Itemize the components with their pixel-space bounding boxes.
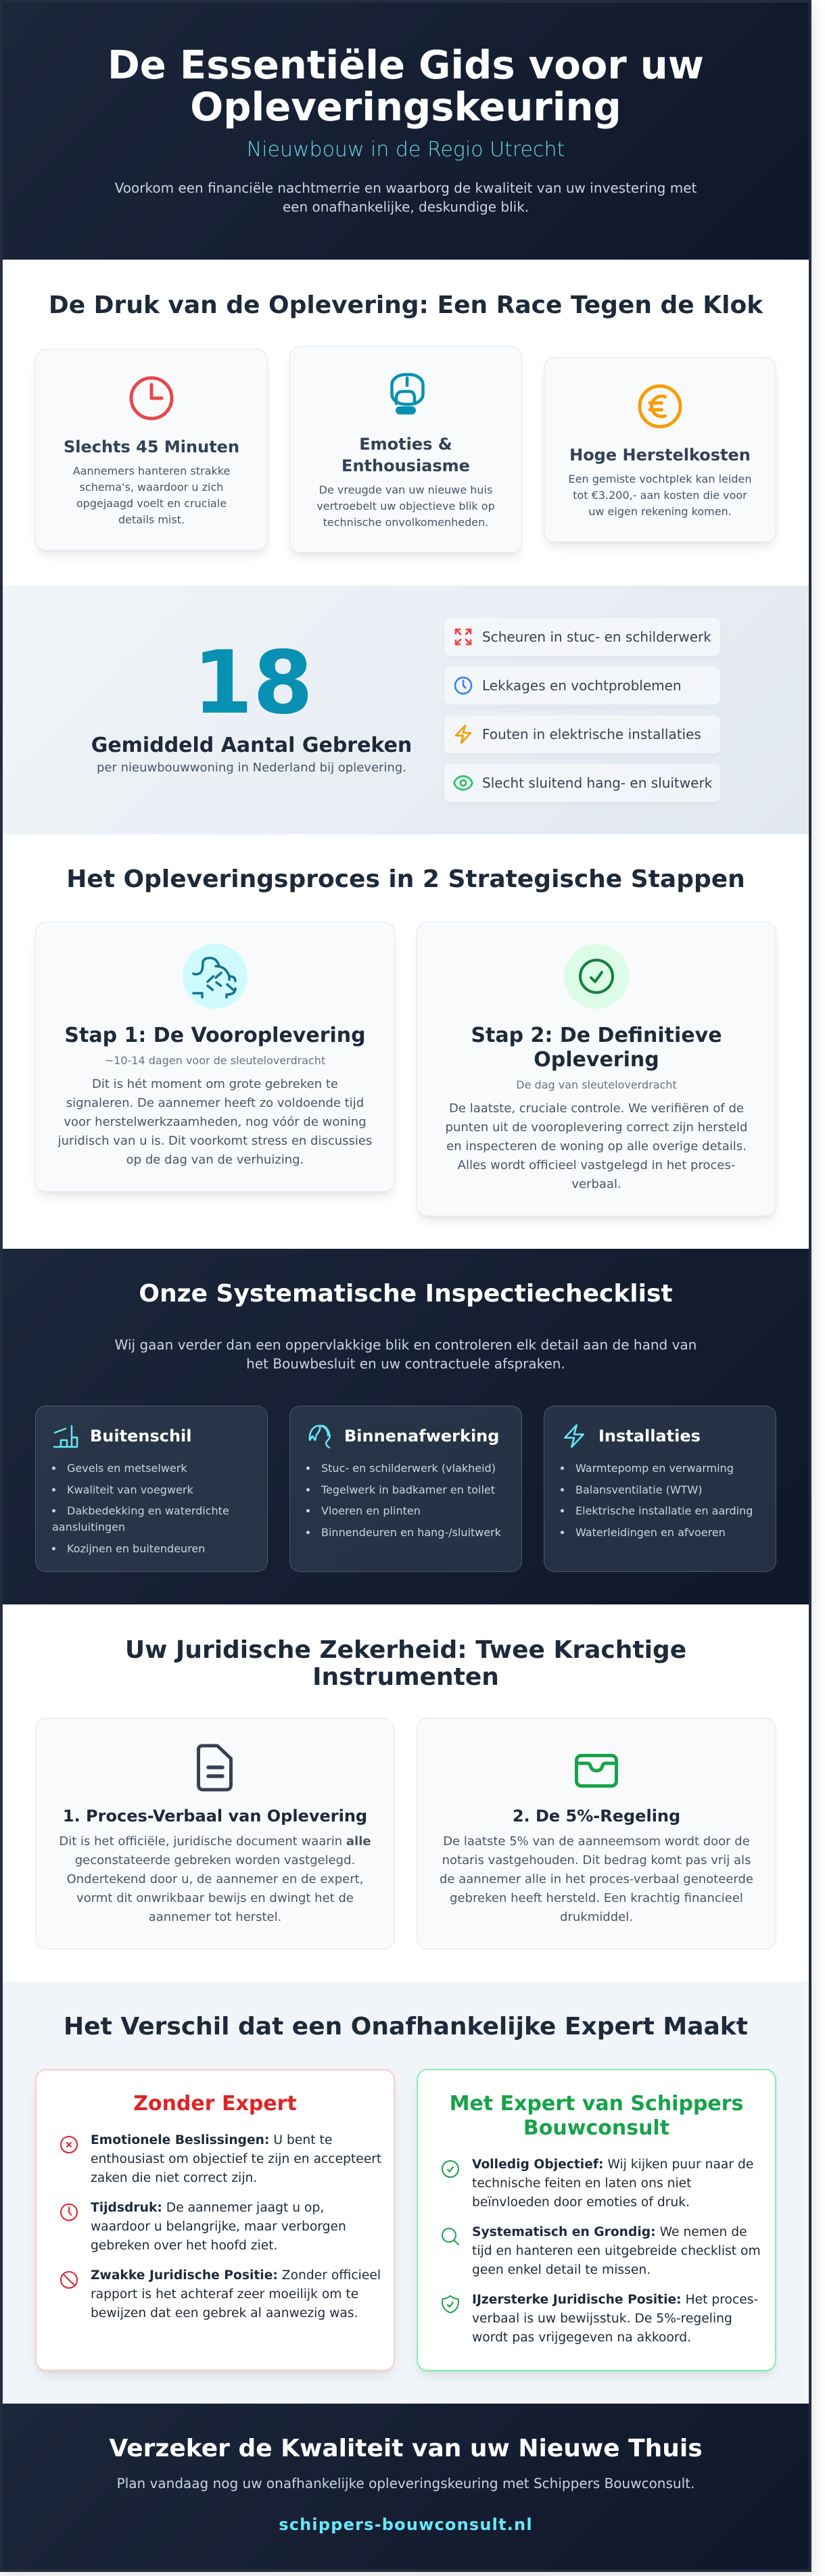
point: time pressure: waardoor u belangrijke, maar verborgen bbox=[91, 2220, 346, 2234]
point: systematic: tijd en hanteren een uitgebreide checklist om bbox=[472, 2244, 761, 2258]
card title: Binnenafwerking bbox=[344, 1427, 499, 1446]
card: without expert bbox=[35, 2069, 395, 2371]
checklist bbox=[561, 1462, 753, 1539]
point: objective bbox=[442, 2157, 753, 2210]
step timing: ~10-14 dagen voor de sleuteloverdracht bbox=[105, 1054, 325, 1067]
card title bbox=[341, 435, 470, 475]
point: objective: technische feiten en laten ons niet bbox=[472, 2176, 691, 2191]
card title: Installaties bbox=[598, 1427, 701, 1446]
card text: details mist. bbox=[118, 513, 185, 526]
icon: deposit box bbox=[575, 1754, 618, 1788]
point: strong legal position bbox=[440, 2291, 753, 2347]
step text bbox=[446, 1101, 747, 1191]
point: time pressure bbox=[60, 2201, 346, 2253]
heading bbox=[125, 1636, 686, 1691]
checklist: Kozijnen en buitendeuren bbox=[67, 1542, 205, 1555]
heading: Verzeker de Kwaliteit van uw Nieuwe Thuis bbox=[109, 2435, 703, 2462]
card text: Aannemers hanteren strakke bbox=[73, 464, 230, 477]
checklist: Warmtepomp en verwarming bbox=[575, 1462, 734, 1475]
card title: 2. De 5%-Regeling bbox=[513, 1807, 680, 1826]
call to action text: Plan vandaag nog uw onafhankelijke opleveringskeuring met Schippers Bouwconsult. bbox=[117, 2475, 694, 2491]
step timing: De dag van sleuteloverdracht bbox=[516, 1078, 677, 1091]
icon: interior bbox=[308, 1425, 331, 1448]
card text: Dit is het officiële, juridische document waarin alle bbox=[59, 1834, 371, 1848]
card title: 1. Proces-Verbaal van Oplevering bbox=[63, 1807, 367, 1826]
card title: Emoties & bbox=[359, 435, 452, 454]
step text: voor herstelwerkzaamheden, nog vóór de woning bbox=[64, 1115, 367, 1129]
card text: geconstateerde gebreken worden vastgelegd. bbox=[75, 1853, 355, 1867]
card: interior bbox=[289, 1406, 522, 1572]
point: time pressure: gebreken over het hoofd ziet. bbox=[91, 2239, 278, 2253]
card text: drukmiddel. bbox=[560, 1910, 633, 1924]
card text: opgejaagd voelt en cruciale bbox=[76, 497, 227, 510]
checklist: Vloeren en plinten bbox=[321, 1504, 421, 1517]
panel: expert comparison bbox=[3, 1982, 809, 2404]
icon: clock bbox=[454, 676, 472, 695]
step title: Stap 2: De Definitieve bbox=[471, 1024, 722, 1047]
heading: Instrumenten bbox=[312, 1663, 499, 1691]
card title bbox=[450, 2092, 743, 2140]
icon: bolt bbox=[454, 725, 472, 744]
panel: footer call to action bbox=[3, 2404, 809, 2569]
title: Opleveringskeuring bbox=[190, 85, 621, 130]
title bbox=[108, 43, 704, 130]
intro text: een onafhankelijke, deskundige blik. bbox=[283, 199, 529, 215]
point: objective: beïnvloeden door emoties of druk. bbox=[472, 2195, 690, 2210]
icon: magnifier bbox=[440, 2226, 461, 2247]
panel: pressure section bbox=[3, 260, 809, 586]
checklist: Binnendeuren en hang-/sluitwerk bbox=[321, 1526, 501, 1539]
card title: Enthousiasme bbox=[341, 456, 470, 475]
icon: cracks bbox=[454, 629, 472, 645]
card: 45 minutes bbox=[35, 349, 268, 550]
point: systematic bbox=[442, 2225, 761, 2277]
card text: schema's, waardoor u zich bbox=[80, 481, 223, 494]
checklist: Tegelwerk in badkamer en toilet bbox=[321, 1483, 495, 1496]
icon: clock bbox=[60, 2203, 78, 2221]
checklist: Dakbedekking en waterdichte aansluitingen bbox=[52, 1504, 229, 1533]
step text: signaleren. De aannemer heeft zo voldoende tijd bbox=[66, 1096, 364, 1110]
checklist: Stuc- en schilderwerk (vlakheid) bbox=[321, 1462, 496, 1475]
card: repair costs bbox=[544, 357, 776, 542]
checklist: Waterleidingen en afvoeren bbox=[575, 1526, 726, 1539]
point: time pressure: Tijdsdruk: De aannemer jaagt u op, bbox=[91, 2201, 324, 2215]
checklist: Elektrische installatie en aarding bbox=[575, 1504, 753, 1517]
heading: Het Verschil dat een Onafhankelijke Expert Maakt bbox=[64, 2013, 748, 2041]
card text: vormt dit onwrikbaar bewijs en dwingt het de bbox=[76, 1891, 354, 1905]
checklist: Gevels en metselwerk bbox=[67, 1462, 187, 1475]
icon: check circle bbox=[442, 2160, 459, 2178]
heading: Uw Juridische Zekerheid: Twee Krachtige bbox=[125, 1636, 686, 1664]
icon: bolt bbox=[564, 1424, 584, 1448]
card title: Bouwconsult bbox=[523, 2116, 669, 2140]
step text: Dit is hét moment om grote gebreken te bbox=[92, 1077, 338, 1091]
icon: euro bbox=[638, 384, 682, 429]
step title: Stap 1: De Vooroplevering bbox=[64, 1024, 366, 1047]
card text bbox=[316, 483, 495, 529]
heading: Het Opleveringsproces in 2 Strategische Stappen bbox=[66, 865, 745, 893]
step title: Oplevering bbox=[534, 1048, 659, 1072]
step text: verbaal. bbox=[571, 1177, 621, 1191]
stat label: Gemiddeld Aantal Gebreken bbox=[91, 734, 412, 757]
card text: Ondertekend door u, de aannemer en de expert, bbox=[67, 1872, 363, 1886]
heading: De Druk van de Oplevering: Een Race Tegen de Klok bbox=[49, 291, 763, 319]
icon: no symbol bbox=[60, 2271, 78, 2289]
card text bbox=[569, 473, 751, 518]
card text bbox=[73, 464, 230, 526]
icon: emotion bbox=[390, 373, 425, 414]
step title bbox=[471, 1024, 722, 1072]
icon: inspection drops bbox=[183, 944, 248, 1009]
step text: juridisch van u is. Dit voorkomt stress en discussies bbox=[58, 1134, 372, 1148]
point: objective: Volledig Objectief: Wij kijken puur naar de bbox=[472, 2157, 753, 2172]
intro text: het Bouwbesluit en uw contractuele afspraken. bbox=[246, 1356, 565, 1372]
item: hardware bbox=[444, 764, 720, 802]
card text: aannemer tot herstel. bbox=[149, 1910, 281, 1924]
point: weak legal position bbox=[60, 2268, 381, 2320]
card text: De laatste 5% van de aanneemsom wordt door de bbox=[443, 1834, 750, 1848]
card text: Een gemiste vochtplek kan leiden bbox=[569, 473, 751, 485]
card title: Hoge Herstelkosten bbox=[569, 446, 751, 464]
item: leaks bbox=[444, 667, 720, 705]
website link: schippers-bouwconsult.nl bbox=[279, 2515, 533, 2534]
intro text: Wij gaan verder dan een oppervlakkige blik en controleren elk detail aan de hand van bbox=[115, 1337, 697, 1353]
title: De Essentiële Gids voor uw bbox=[108, 43, 704, 88]
point: strong legal position: wordt pas vrijgegeven na akkoord. bbox=[472, 2331, 691, 2345]
item: electrical: Fouten in elektrische installaties bbox=[482, 726, 701, 742]
card text: vertroebelt uw objectieve blik op bbox=[316, 500, 495, 512]
point: emotional decisions: Emotionele Beslissingen: U bent te bbox=[91, 2133, 332, 2147]
point: weak legal position: bewijzen dat een gebrek al aanwezig was. bbox=[91, 2306, 358, 2320]
panel: inspection checklist bbox=[3, 1249, 809, 1604]
checklist: Kwaliteit van voegwerk bbox=[67, 1483, 193, 1496]
card text: technische onvolkomenheden. bbox=[323, 516, 488, 529]
card: installations bbox=[544, 1406, 776, 1572]
item: cracks bbox=[444, 618, 720, 656]
card text bbox=[440, 1834, 753, 1924]
card text bbox=[59, 1834, 371, 1924]
icon: x circle bbox=[60, 2136, 78, 2153]
icon: shield bbox=[440, 2293, 461, 2315]
checklist bbox=[306, 1462, 501, 1539]
panel: two steps bbox=[3, 834, 809, 1249]
big number: 18 bbox=[193, 633, 313, 734]
checklist bbox=[52, 1462, 229, 1555]
card: with expert bbox=[417, 2069, 776, 2371]
card text: de aannemer alle in het proces-verbaal genoteerde bbox=[440, 1872, 753, 1886]
point: weak legal position: Zwakke Juridische Positie: Zonder officieel bbox=[91, 2268, 381, 2283]
item: cracks: Scheuren in stuc- en schilderwerk bbox=[482, 629, 711, 645]
point: strong legal position: IJzersterke Juridische Positie: Het proces- bbox=[472, 2293, 758, 2307]
card: exterior bbox=[35, 1406, 268, 1572]
item: leaks: Lekkages en vochtproblemen bbox=[482, 677, 682, 694]
step text: punten uit de vooroplevering correct zijn hersteld bbox=[446, 1120, 747, 1135]
step text: De laatste, cruciale controle. We verifiëren of de bbox=[449, 1101, 744, 1116]
panel: defects statistic bbox=[3, 586, 809, 834]
intro text bbox=[115, 180, 697, 215]
subtitle: Nieuwbouw in de Regio Utrecht bbox=[247, 138, 565, 162]
step text: en inspecteren de woning op alle overige details. bbox=[446, 1139, 747, 1153]
heading: Onze Systematische Inspectiechecklist bbox=[139, 1280, 673, 1308]
point: strong legal position: verbaal is uw bewijsstuk. De 5%-regeling bbox=[472, 2312, 732, 2326]
step text bbox=[57, 1077, 372, 1167]
card text: tot €3.200,- aan kosten die voor bbox=[573, 489, 747, 502]
card: proces-verbaal bbox=[35, 1718, 395, 1949]
card text: De vreugde van uw nieuwe huis bbox=[319, 483, 492, 496]
item: hardware: Slecht sluitend hang- en sluitwerk bbox=[482, 775, 712, 791]
card text: gebreken heeft hersteld. Een krachtig financieel bbox=[450, 1891, 743, 1905]
intro text bbox=[115, 1337, 697, 1372]
card: 5 percent rule bbox=[417, 1718, 776, 1949]
intro text: Voorkom een financiële nachtmerrie en waarborg de kwaliteit van uw investering met bbox=[115, 180, 697, 196]
icon: house bbox=[53, 1425, 78, 1448]
panel: legal instruments bbox=[3, 1604, 809, 1982]
card: emotions bbox=[289, 346, 522, 553]
icon: check bbox=[564, 944, 629, 1009]
step text: op de dag van de verhuizing. bbox=[126, 1153, 304, 1167]
card title: Zonder Expert bbox=[133, 2092, 297, 2116]
card: step 1 bbox=[35, 922, 395, 1192]
point: systematic: geen enkel detail te missen. bbox=[472, 2263, 651, 2277]
point: emotional decisions bbox=[60, 2133, 381, 2185]
icon: eye bbox=[453, 775, 473, 791]
checklist: Balansventilatie (WTW) bbox=[575, 1483, 702, 1496]
panel: header bbox=[3, 3, 809, 260]
card text: uw eigen rekening komen. bbox=[588, 505, 732, 518]
card title: Met Expert van Schippers bbox=[450, 2092, 743, 2116]
icon: document bbox=[197, 1744, 233, 1792]
card title: Slechts 45 Minuten bbox=[64, 437, 239, 456]
icon: clock bbox=[130, 376, 173, 421]
card title: Buitenschil bbox=[90, 1427, 192, 1446]
step text: Alles wordt officieel vastgelegd in het proces- bbox=[458, 1158, 735, 1172]
stat note: per nieuwbouwwoning in Nederland bij oplevering. bbox=[97, 761, 406, 775]
point: systematic: Systematisch en Grondig: We nemen de bbox=[472, 2225, 747, 2239]
card text: notaris vastgehouden. Dit bedrag komt pas vrij als bbox=[442, 1853, 751, 1867]
item: electrical bbox=[444, 715, 720, 753]
card: step 2 bbox=[417, 922, 776, 1216]
point: weak legal position: rapport is het achteraf zeer moeilijk om te bbox=[91, 2287, 358, 2301]
point: emotional decisions: enthousiast om objectief te zijn en accepteert bbox=[91, 2152, 381, 2166]
point: emotional decisions: zaken die niet correct zijn. bbox=[91, 2171, 257, 2185]
